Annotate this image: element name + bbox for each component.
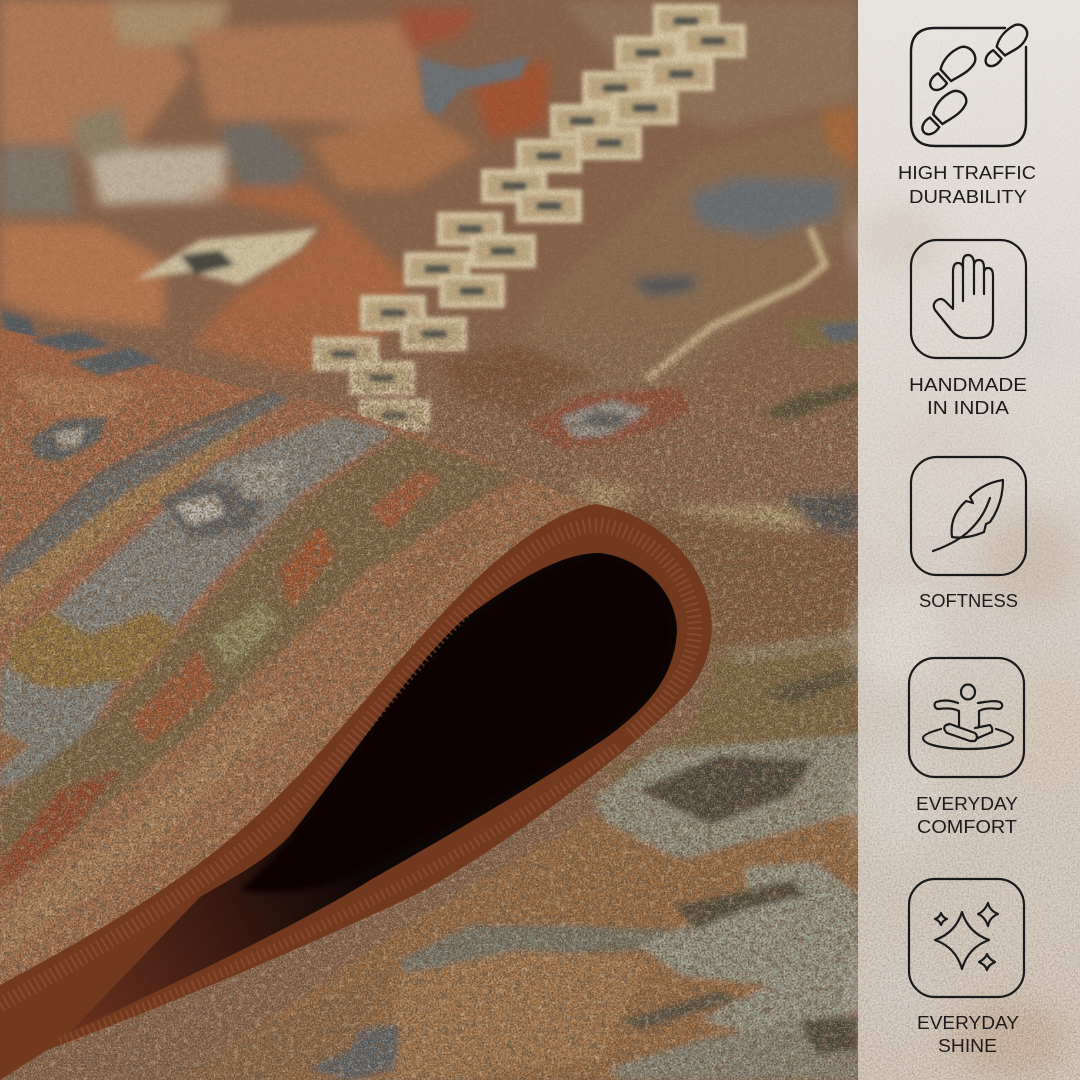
label: softness: SOFTNESS bbox=[919, 591, 1018, 611]
label: handmade in india: IN INDIA bbox=[927, 398, 1009, 418]
photo: rolled rug bbox=[0, 0, 858, 1080]
bound edge and underside of the roll bbox=[0, 504, 712, 1080]
label: everyday shine: SHINE bbox=[938, 1036, 997, 1056]
label: everyday shine: EVERYDAY bbox=[917, 1013, 1019, 1033]
feature: softness bbox=[911, 457, 1026, 611]
blue motifs on the face bbox=[0, 332, 275, 565]
label: high traffic durability bbox=[898, 163, 1036, 207]
label: everyday comfort: EVERYDAY bbox=[916, 794, 1018, 814]
feature: everyday comfort bbox=[909, 658, 1024, 837]
rug field: upper area bbox=[0, 0, 858, 650]
label: high traffic durability: DURABILITY bbox=[909, 187, 1027, 207]
label: everyday shine bbox=[917, 1013, 1019, 1056]
label: everyday comfort bbox=[916, 794, 1018, 837]
label: everyday comfort: COMFORT bbox=[917, 817, 1017, 837]
icon: footprints bbox=[911, 20, 1032, 146]
upper rug: crisp motifs bbox=[0, 55, 858, 450]
feature: handmade in india bbox=[909, 240, 1027, 418]
label: high traffic durability: HIGH TRAFFIC bbox=[898, 163, 1036, 183]
icon: meditating person bbox=[909, 658, 1024, 777]
panel: translucent features sidebar bbox=[855, 0, 1080, 1080]
icon: sparkles bbox=[909, 879, 1024, 997]
label: handmade in india bbox=[909, 375, 1027, 418]
icon: hand bbox=[911, 240, 1026, 358]
woven texture bbox=[0, 0, 858, 1080]
label: handmade in india: HANDMADE bbox=[909, 375, 1027, 395]
rolled rug face with border bands bbox=[0, 329, 594, 984]
cream stepped diamond band bbox=[316, 7, 743, 428]
rug field: lower right bbox=[170, 625, 858, 1080]
feature: everyday shine bbox=[909, 879, 1024, 1056]
dark dashes inside the band bbox=[332, 21, 725, 416]
feature: high traffic durability bbox=[898, 20, 1036, 207]
icon: feather bbox=[911, 457, 1026, 575]
